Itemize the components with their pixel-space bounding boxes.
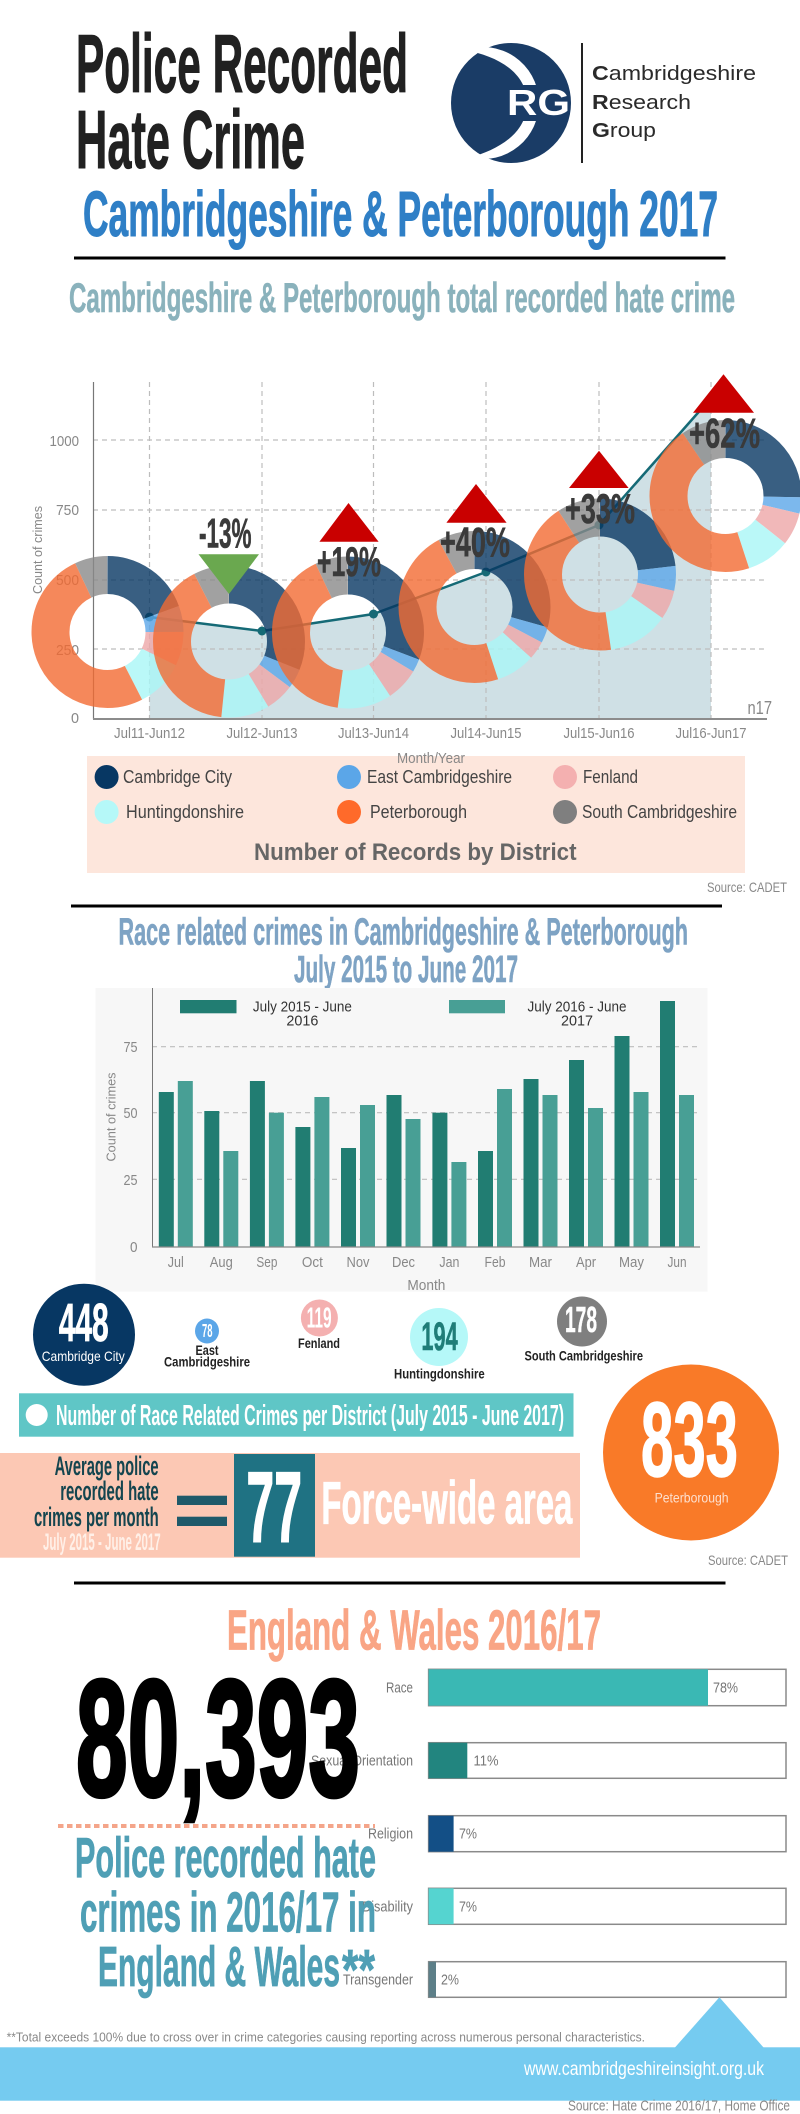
heading: race related crimes: July 2015 to June 2017 [294, 949, 518, 991]
footer band [0, 1997, 800, 2101]
axis labels: Dec [392, 1254, 415, 1271]
bar: Sexual Orientation 11%: Sexual Orientation [311, 1753, 413, 1770]
chart legend: 2016 [286, 1013, 318, 1030]
change +62%: +62% [689, 409, 760, 456]
change +40%: +40% [440, 519, 510, 566]
x axis labels: Jul15-Jun16 [564, 725, 634, 742]
title [76, 17, 408, 186]
x axis labels: Jul16-Jun17 [676, 725, 746, 742]
donut: Jul15-Jun16 [543, 518, 657, 632]
axis labels: Sep [256, 1254, 277, 1271]
panel: district legend: Month/Year [397, 750, 465, 767]
bar: Sexual Orientation 11% [311, 1743, 786, 1778]
y axis labels: 0 [71, 710, 79, 727]
bubble: South Cambridgeshire 178: South Cambridgeshire [524, 1348, 643, 1364]
y axis labels: Count of crimes [30, 506, 45, 594]
axis labels: 0 [130, 1239, 138, 1256]
change -13% [198, 509, 259, 594]
axis labels: Aug [210, 1254, 233, 1271]
bars: July 2016 - June 2017 [178, 1081, 694, 1247]
banner: number of race related crimes per district [19, 1393, 574, 1437]
axis labels: Oct [302, 1254, 324, 1271]
axis labels: Month [407, 1277, 445, 1294]
bar: Religion 7% [368, 1816, 786, 1852]
chart legend: July 2015 - June [253, 999, 352, 1016]
logo: Cambridgeshire Research Group: Cambridgeshire [592, 63, 756, 85]
axis labels: Jul [168, 1254, 184, 1271]
bar: Disability 7% [362, 1888, 786, 1924]
panel: district legend: Huntingdonshire [126, 802, 244, 822]
bubble: Huntingdonshire 194: 194 [421, 1315, 458, 1359]
text: police recorded hate crimes in England & Wales: England & Wales [98, 1935, 340, 1999]
axis labels: 25 [124, 1172, 138, 1189]
average text: crimes per month [34, 1502, 159, 1532]
panel: district legend: Number of Records by District [254, 839, 577, 866]
chart legend [180, 999, 626, 1030]
panel: district legend: Fenland [583, 767, 638, 787]
panel: force-wide average [0, 1451, 580, 1564]
axis labels: Mar [529, 1254, 552, 1271]
bubble: Peterborough 833 [603, 1364, 779, 1540]
logo: Cambridgeshire Research Group: Research [592, 92, 691, 114]
bar: Sexual Orientation 11%: 11% [474, 1753, 498, 1770]
bubble: Cambridge City 448: 448 [59, 1293, 109, 1353]
bubble: East Cambridgeshire 78: East [196, 1342, 219, 1358]
axis labels [104, 1039, 686, 1294]
bubble: Fenland 119 [298, 1300, 340, 1351]
bars: July 2015 - June 2016 [159, 1001, 675, 1247]
y axis labels: 750 [56, 502, 79, 519]
bubble: Cambridge City 448 [33, 1284, 135, 1386]
bubble: South Cambridgeshire 178: 178 [565, 1299, 597, 1340]
panel: district legend [87, 750, 745, 873]
donut: Jul11-Jun12 [50, 575, 164, 689]
bubble: East Cambridgeshire 78: 78 [202, 1321, 212, 1341]
title: Hate Crime [76, 93, 305, 186]
bar: Disability 7%: 7% [459, 1899, 477, 1916]
line chart with district donuts [30, 374, 782, 742]
y axis labels: 500 [56, 572, 79, 589]
change +40% [440, 484, 510, 566]
y axis labels: 250 [56, 642, 79, 659]
bubble: Peterborough 833: Peterborough [655, 1490, 729, 1506]
axis labels: May [619, 1254, 644, 1271]
change +33% [565, 451, 635, 532]
x axis labels [114, 698, 772, 742]
change +19%: +19% [317, 538, 381, 585]
axis labels: Nov [346, 1254, 370, 1271]
axis labels: Count of crimes [104, 1072, 118, 1162]
change -13%: -13% [199, 509, 252, 556]
bubble: East Cambridgeshire 78: Cambridgeshire [164, 1354, 250, 1370]
footnote: **Total exceeds 100% due to cross over in crime categories causing reporting across numerous personal characteristics. [7, 2030, 645, 2045]
bar chart: race related crimes per month [96, 988, 708, 1294]
axis labels: Feb [484, 1254, 506, 1271]
equals sign [177, 1496, 227, 1526]
logo: Cambridgeshire Research Group [451, 43, 756, 163]
panel: district legend: Cambridge City [123, 767, 232, 787]
change +33%: +33% [565, 485, 635, 532]
x axis labels: Jul14-Jun15 [450, 725, 522, 742]
bubble: South Cambridgeshire 178 [524, 1296, 643, 1364]
stat: 77: 77 [246, 1452, 302, 1564]
text: police recorded hate crimes in England & Wales: ** [342, 1938, 376, 2002]
logo: Cambridgeshire Research Group: Group [592, 120, 656, 142]
x axis labels: Jul13-Jun14 [338, 725, 409, 742]
panel: force-wide average: July 2015 - June 2017 [43, 1529, 161, 1556]
bubble: East Cambridgeshire 78 [164, 1318, 250, 1370]
bubble: Huntingdonshire 194: Huntingdonshire [394, 1366, 485, 1382]
y axis labels [30, 433, 79, 727]
panel: force-wide average: Force-wide area [321, 1469, 573, 1536]
change +62% [689, 374, 760, 456]
bubble: Fenland 119: Fenland [298, 1335, 340, 1351]
bubble: Fenland 119: 119 [307, 1302, 332, 1334]
donut: Jul16-Jun17 [668, 439, 782, 553]
text: police recorded hate crimes in England & Wales: Police recorded hate [75, 1826, 376, 1890]
bar chart: crime categories [311, 1669, 786, 1997]
bar: Race 78%: 78% [713, 1680, 738, 1697]
donut: Jul12-Jun13 [172, 584, 286, 698]
axis labels: 50 [124, 1105, 138, 1122]
logo: Cambridgeshire Research Group: RG [507, 82, 570, 123]
x axis labels: Jul12-Jun13 [226, 725, 298, 742]
panel: district legend: South Cambridgeshire [582, 802, 737, 822]
bar: Religion 7%: 7% [459, 1826, 477, 1843]
y axis labels: 1000 [50, 433, 79, 450]
axis labels: Jan [439, 1254, 459, 1271]
panel: district legend: Peterborough [370, 802, 467, 822]
average text [34, 1451, 161, 1556]
heading: race related crimes [118, 911, 688, 991]
bar: Transgender 2% [343, 1962, 786, 1997]
bar: Transgender 2%: 2% [441, 1971, 459, 1988]
change +19% [317, 503, 381, 585]
chart legend: July 2016 - June [528, 999, 626, 1016]
axis labels: 75 [124, 1039, 138, 1056]
x axis labels: Jul11-Jun12 [114, 725, 185, 742]
stat: 80,393: 80,393 [76, 1646, 360, 1832]
axis labels: Jun [668, 1254, 686, 1271]
bubble: Huntingdonshire 194 [394, 1308, 485, 1382]
bar: Race 78% [386, 1669, 786, 1706]
bar: Religion 7%: Religion [368, 1826, 413, 1843]
area under line [150, 398, 711, 719]
title: Police Recorded [76, 17, 408, 110]
average text: Average police [55, 1451, 159, 1481]
stat: 77 [234, 1452, 315, 1564]
bar: Race 78%: Race [386, 1680, 413, 1697]
donut: Jul14-Jun15 [418, 550, 532, 664]
x axis labels: n17 [748, 698, 772, 718]
trend line [145, 398, 711, 636]
text: police recorded hate crimes in England & Wales [75, 1826, 376, 2002]
donut: Jul13-Jun14 [291, 576, 405, 690]
bar: Transgender 2%: Transgender [343, 1971, 413, 1988]
bar: Disability 7%: Disability [362, 1899, 413, 1916]
average text: recorded hate [60, 1476, 159, 1506]
chart legend: 2017 [561, 1013, 593, 1030]
text: police recorded hate crimes in England & Wales: crimes in 2016/17 in [80, 1881, 376, 1945]
panel: district legend: East Cambridgeshire [367, 767, 512, 787]
bubble: Cambridge City 448: Cambridge City [42, 1348, 125, 1364]
axis labels: Apr [576, 1254, 596, 1271]
